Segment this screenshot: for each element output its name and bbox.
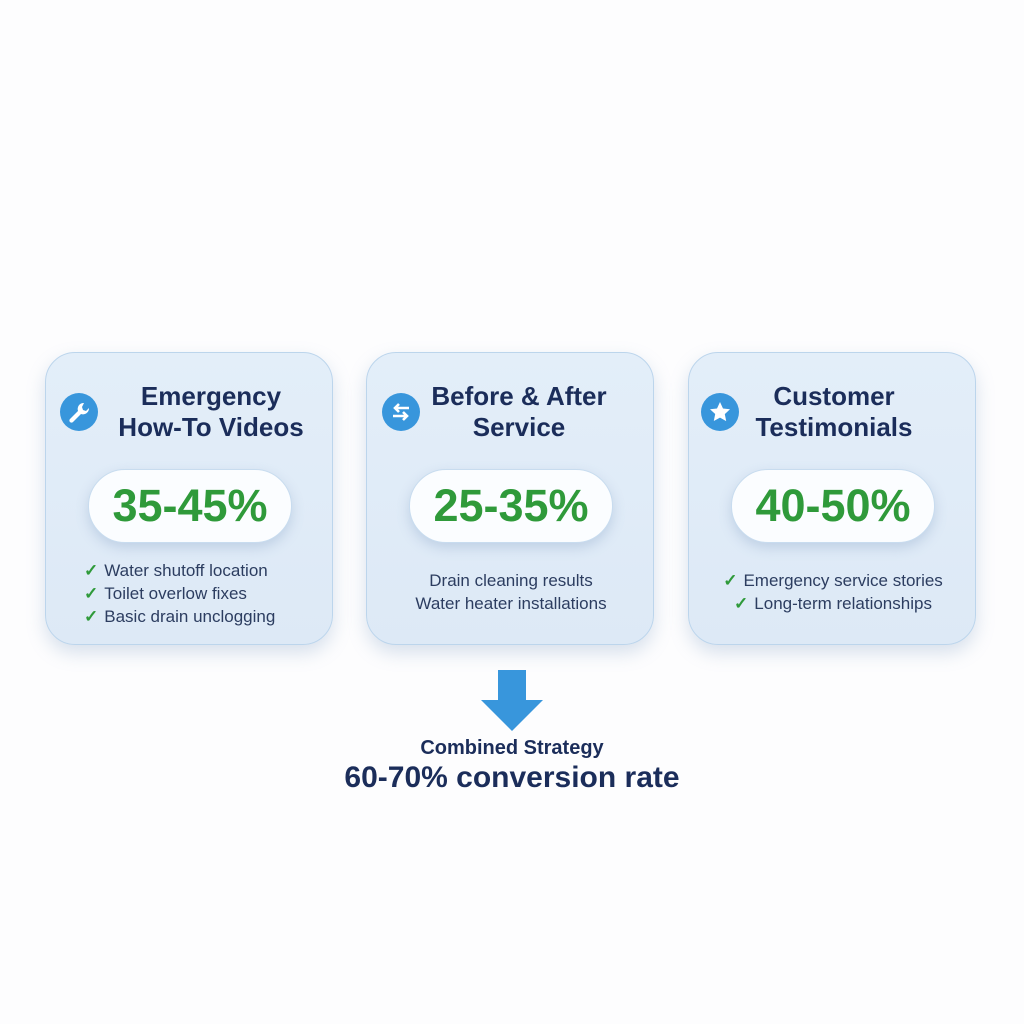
checklist: ✓ Basic drain unclogging bbox=[84, 607, 275, 626]
checklist: ✓ Toilet overlow fixes bbox=[84, 584, 247, 603]
icon: wrench bbox=[60, 393, 98, 431]
checklist bbox=[84, 561, 275, 626]
heading: Before & After bbox=[431, 381, 607, 411]
heading: Testimonials bbox=[755, 412, 912, 442]
panel: before & after service bbox=[366, 352, 654, 645]
result text: Combined Strategy bbox=[420, 737, 604, 759]
checklist: ✓ Water shutoff location bbox=[84, 561, 268, 580]
result text: 60-70% conversion rate bbox=[344, 761, 680, 794]
checklist bbox=[723, 571, 943, 613]
arrow: down bbox=[481, 670, 543, 731]
stat pill: 40-50% bbox=[755, 480, 911, 531]
panel: emergency how-to videos bbox=[45, 352, 333, 645]
panel: customer testimonials bbox=[688, 352, 976, 645]
stat pill: 35-45% bbox=[112, 480, 268, 531]
text list: Water heater installations bbox=[415, 594, 607, 613]
heading bbox=[431, 381, 607, 442]
text list: Drain cleaning results bbox=[429, 571, 593, 590]
stat pill: 25-35% bbox=[433, 480, 589, 531]
checklist: ✓ Emergency service stories bbox=[723, 571, 943, 590]
heading bbox=[755, 381, 912, 442]
heading bbox=[118, 381, 304, 442]
heading: Customer bbox=[773, 381, 895, 411]
icon: star bbox=[701, 393, 739, 431]
icon: swap arrows bbox=[382, 393, 420, 431]
stat pill bbox=[409, 469, 613, 543]
stat pill bbox=[88, 469, 292, 543]
heading: Emergency bbox=[141, 381, 281, 411]
heading: How-To Videos bbox=[118, 412, 304, 442]
text list bbox=[415, 571, 607, 613]
result text bbox=[344, 737, 680, 794]
heading: Service bbox=[473, 412, 565, 442]
checklist: ✓ Long-term relationships bbox=[734, 594, 932, 613]
stat pill bbox=[731, 469, 935, 543]
